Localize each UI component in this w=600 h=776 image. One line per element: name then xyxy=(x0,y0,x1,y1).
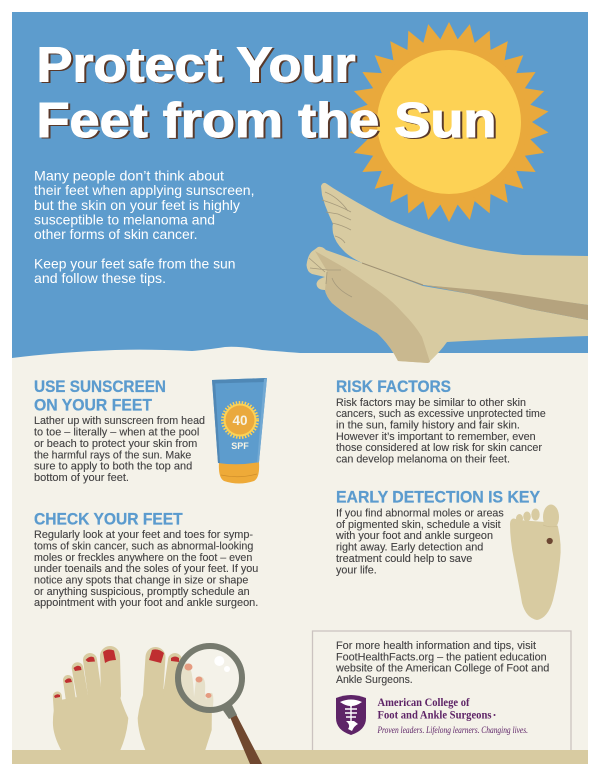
panel: use sunscreen: the harmful rays of the sun. Make xyxy=(34,449,191,461)
panel: risk factors: can develop melanoma on their feet. xyxy=(336,454,510,466)
heading: CHECK YOUR FEET xyxy=(34,510,183,528)
handle xyxy=(230,714,262,764)
lower leg and foot xyxy=(306,247,588,363)
panel: use sunscreen: or beach to protect your skin from xyxy=(34,438,197,450)
title: Protect Your xyxy=(36,38,356,92)
upper leg and foot xyxy=(321,183,588,305)
magnified nails xyxy=(184,664,212,698)
ring xyxy=(178,646,242,710)
icon: sunscreen tube: 40 xyxy=(232,413,248,428)
panel: use sunscreen: ON YOUR FEET xyxy=(34,396,152,414)
panel: use sunscreen: sure to apply to both the top and xyxy=(34,461,192,473)
lens xyxy=(178,646,242,710)
title: Feet from the Sun xyxy=(38,95,498,149)
intro text: Keep your feet safe from the sun xyxy=(34,256,236,272)
heading: USE SUNSCREEN xyxy=(34,378,166,396)
illustration: feet in the sun xyxy=(306,183,588,363)
icon: sun xyxy=(348,22,550,222)
right foot xyxy=(138,657,212,751)
more information box: website of the American College of Foot and xyxy=(335,663,549,675)
panel: use sunscreen xyxy=(34,378,205,484)
icon: magnifying glass xyxy=(178,646,262,764)
panel: early detection: with your foot and ankle surgeon xyxy=(335,530,493,542)
toe creases xyxy=(309,192,423,297)
logo: American College of Foot and Ankle Surgeons: American College of xyxy=(378,697,470,709)
left foot nails xyxy=(54,650,116,698)
title xyxy=(36,38,498,149)
panel: risk factors: However it’s important to remember, even xyxy=(336,431,536,443)
intro text: but the skin on your feet is highly xyxy=(34,198,240,213)
shaded side of lower foot xyxy=(315,251,430,363)
icon: sunscreen tube: SPF xyxy=(231,441,249,451)
icon: shield caduceus xyxy=(336,695,366,735)
leg shadow xyxy=(423,285,588,320)
panel: risk factors xyxy=(336,378,546,466)
intro text: susceptible to melanoma and xyxy=(34,212,215,228)
heading: RISK FACTORS xyxy=(336,378,451,396)
logo: American College of Foot and Ankle Surgeons: Proven leaders. Lifelong learners. Changing lives. xyxy=(377,725,528,735)
panel: check your feet: notice any spots that change in size or shape xyxy=(34,574,248,586)
body text: Risk factors may be similar to other skin xyxy=(336,397,526,409)
panel: use sunscreen: to toe – literally – when at the pool xyxy=(34,426,199,438)
title: Feet from the Sun xyxy=(36,94,496,148)
heading: EARLY DETECTION IS KEY xyxy=(336,488,540,506)
panel: check your feet xyxy=(34,510,258,609)
panel: early detection: your life. xyxy=(336,564,377,576)
logo: American College of Foot and Ankle Surgeons: Foot and Ankle Surgeons xyxy=(378,710,492,722)
body text: Lather up with sunscreen from head xyxy=(34,415,205,427)
panel: use sunscreen: bottom of your feet. xyxy=(34,472,129,484)
body text: Regularly look at your feet and toes for symp- xyxy=(34,529,253,541)
intro text: other forms of skin cancer. xyxy=(34,227,198,242)
panel: check your feet: appointment with your foot and ankle surgeon. xyxy=(34,597,258,609)
intro text: Many people don’t think about xyxy=(34,168,224,184)
right foot nails xyxy=(149,649,179,663)
left foot xyxy=(53,656,128,751)
illustration: feet with painted toenails xyxy=(53,646,262,764)
lens highlights xyxy=(214,656,224,666)
panel: early detection: right away. Early detection and xyxy=(336,541,483,553)
sand band xyxy=(12,750,588,764)
intro text: their feet when applying sunscreen, xyxy=(34,183,254,198)
more information box: Ankle Surgeons. xyxy=(336,674,413,686)
panel: early detection: treatment could help to save xyxy=(336,553,472,565)
more information box: FootHealthFacts.org – the patient education xyxy=(336,651,547,663)
panel: risk factors: in the sun, family history and fair skin. xyxy=(336,420,520,432)
more information box xyxy=(312,631,571,750)
title: Protect Your xyxy=(38,40,358,94)
intro text xyxy=(34,168,254,286)
panel: risk factors: cancers, such as excessive unprotected time xyxy=(336,408,546,420)
body text: If you find abnormal moles or areas xyxy=(336,508,504,520)
panel: check your feet: moles or freckles anywhere on the foot – even xyxy=(34,552,252,564)
panel: check your feet: toms of skin cancer, such as abnormal-looking xyxy=(34,540,253,552)
logo: American College of Foot and Ankle Surgeons xyxy=(336,695,528,735)
blue sky banner xyxy=(12,12,588,358)
more information box: For more health information and tips, visit xyxy=(336,640,537,652)
magnified toes xyxy=(178,662,213,709)
panel: check your feet: or anything suspicious, promptly schedule an xyxy=(34,586,250,598)
icon: foot sole with mole xyxy=(510,504,561,620)
panel: early detection xyxy=(335,488,540,576)
panel: check your feet: under toenails and the soles of your feet. If you xyxy=(34,563,258,575)
icon: sunscreen tube xyxy=(212,378,267,484)
panel: early detection: of pigmented skin, schedule a visit xyxy=(336,519,502,531)
panel: risk factors: those considered at low risk for skin cancer xyxy=(336,442,542,454)
intro text: and follow these tips. xyxy=(34,271,166,286)
